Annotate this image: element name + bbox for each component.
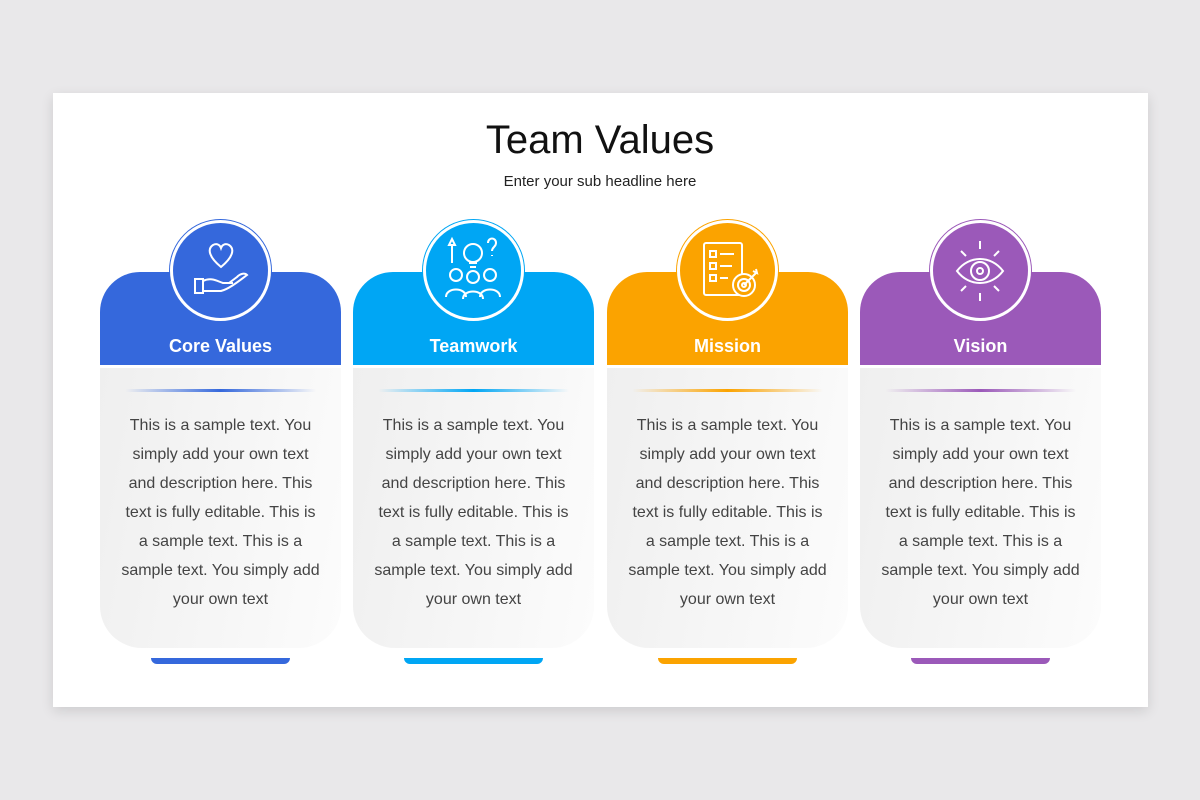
label: Core Values	[169, 336, 272, 356]
panel: core values	[100, 219, 341, 664]
text body: text is fully editable. This is	[632, 504, 822, 521]
header: core values	[100, 272, 341, 365]
text body: text is fully editable. This is	[885, 504, 1076, 521]
text body: text is fully editable. This is	[378, 504, 568, 521]
subtitle: Enter your sub headline here	[504, 173, 696, 190]
text body	[860, 368, 1101, 648]
slide background	[53, 93, 1148, 707]
text body: a sample text. This is a	[646, 533, 809, 550]
text body	[353, 368, 594, 648]
text body: This is a sample text. You	[890, 417, 1071, 434]
icon: team ideas	[423, 220, 524, 321]
title: Team Values	[486, 118, 714, 162]
text body: your own text	[426, 591, 521, 608]
text body: and description here. This	[129, 475, 312, 492]
text body: This is a sample text. You	[637, 417, 818, 434]
text body: simply add your own text	[132, 446, 309, 463]
label: Mission	[694, 336, 761, 356]
text body: a sample text. This is a	[139, 533, 302, 550]
panel: teamwork	[353, 219, 594, 664]
text body: text is fully editable. This is	[125, 504, 316, 521]
text body: sample text. You simply add	[374, 562, 573, 579]
header: vision	[860, 272, 1101, 365]
text body: your own text	[680, 591, 775, 608]
text body: simply add your own text	[639, 446, 816, 463]
bottom tab	[404, 658, 543, 664]
bottom tab	[911, 658, 1050, 664]
text body: This is a sample text. You	[383, 417, 564, 434]
text body: sample text. You simply add	[121, 562, 320, 579]
icon: eye	[930, 220, 1031, 321]
bottom tab	[658, 658, 797, 664]
bottom tab	[151, 658, 290, 664]
text body: and description here. This	[889, 475, 1072, 492]
text body: and description here. This	[382, 475, 565, 492]
text body: sample text. You simply add	[628, 562, 827, 579]
label: Vision	[954, 336, 1007, 356]
text body: This is a sample text. You	[130, 417, 311, 434]
panel: mission	[607, 219, 848, 664]
header: mission	[607, 272, 848, 365]
header: teamwork	[353, 272, 594, 365]
icon: checklist target	[677, 220, 778, 321]
text body: your own text	[933, 591, 1028, 608]
text body	[100, 368, 341, 648]
text body: simply add your own text	[385, 446, 562, 463]
text body	[607, 368, 848, 648]
text body: a sample text. This is a	[899, 533, 1062, 550]
icon: heart in hand	[170, 220, 271, 321]
text body: and description here. This	[636, 475, 819, 492]
text body: your own text	[173, 591, 268, 608]
panel: vision	[860, 219, 1101, 664]
text body: a sample text. This is a	[392, 533, 555, 550]
label: Teamwork	[430, 336, 517, 356]
text body: sample text. You simply add	[881, 562, 1080, 579]
text body: simply add your own text	[892, 446, 1069, 463]
